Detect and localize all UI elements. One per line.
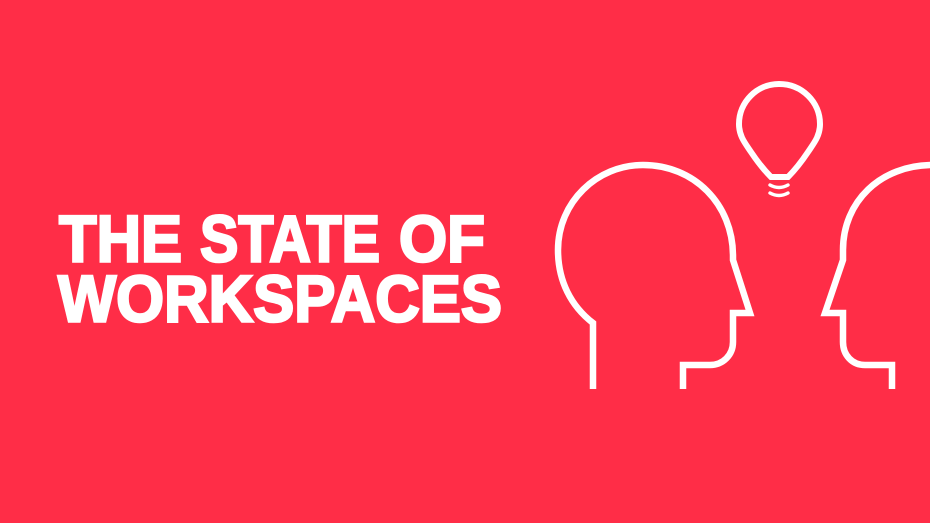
- icon: light bulb: [739, 84, 820, 196]
- title: [58, 202, 502, 336]
- icon: left head outline: [558, 165, 750, 389]
- title: OF: [399, 202, 485, 276]
- title: THE: [59, 202, 182, 276]
- bulb base lines: [770, 185, 788, 196]
- title: STATE: [200, 202, 380, 276]
- icon: right head outline: [825, 165, 930, 389]
- title: WORKSPACES: [58, 262, 502, 336]
- bulb glass outline: [739, 84, 820, 177]
